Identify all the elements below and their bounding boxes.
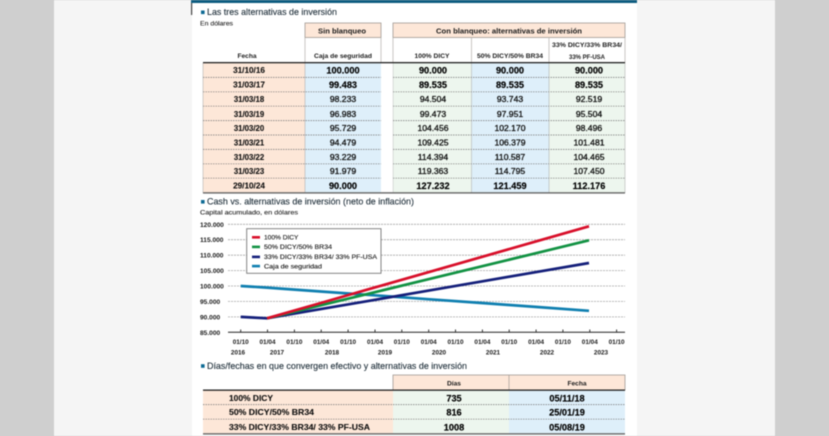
column: 33% DICY/33% BR34/33% PF-USA: 90.000 — [575, 65, 603, 75]
column: 33% DICY/33% BR34/33% PF-USA: 92.519 — [576, 94, 602, 104]
column: safe deposit box: 95.729 — [330, 123, 356, 133]
x axis: 2019 — [378, 350, 393, 356]
date column: 31/03/19 — [234, 110, 265, 119]
column headers: Caja de seguridad — [314, 53, 372, 60]
x axis: 01/04 — [313, 339, 330, 346]
column: 33% DICY/33% BR34/33% PF-USA: 89.535 — [575, 80, 603, 90]
date column: 31/03/18 — [234, 95, 265, 104]
row: 100% DICY: 05/11/18 — [549, 394, 585, 404]
column: 50% DICY/50% BR34: 90.000 — [496, 65, 524, 75]
column: safe deposit box: 100.000 — [326, 65, 360, 75]
legend: Caja de seguridad — [264, 263, 322, 270]
x axis: 2021 — [486, 350, 501, 356]
column: 50% DICY/50% BR34: 97.951 — [497, 109, 523, 119]
subtitle: accumulated capital: Capital acumulado, en dólares — [200, 210, 299, 216]
heading: investment alternatives: Las tres alternativas de inversión — [207, 7, 337, 17]
column: 33% DICY/33% BR34/33% PF-USA: 95.504 — [576, 109, 602, 119]
column headers — [237, 28, 622, 61]
date column: 31/03/20 — [234, 124, 265, 133]
line chart — [200, 222, 625, 356]
x axis: 01/04 — [474, 339, 491, 346]
column: 33% DICY/33% BR34/33% PF-USA: 98.496 — [576, 123, 602, 133]
column: 100% DICY: 119.363 — [418, 166, 448, 176]
column: safe deposit box: 99.483 — [329, 80, 357, 90]
column: safe deposit box: 96.983 — [330, 109, 356, 119]
column: 100% DICY: 109.425 — [417, 138, 449, 148]
column headers: Con blanqueo: alternativas de inversión — [436, 28, 582, 36]
column headers: Sin blanqueo — [318, 28, 366, 36]
x axis: 01/10 — [340, 339, 357, 346]
column headers: Fecha — [567, 380, 587, 388]
row: 50% DICY/50% BR34: 25/01/19 — [549, 408, 585, 418]
column: 50% DICY/50% BR34: 121.459 — [493, 181, 527, 191]
row: 33% DICY/33% BR34/33% PF-USA: 05/08/19 — [549, 422, 585, 432]
row: 33% DICY/33% BR34/33% PF-USA: 33% DICY/33% BR34/ 33% PF-USA — [229, 423, 370, 432]
column headers: 100% DICY — [414, 53, 450, 60]
y axis labels: 110.000 — [200, 253, 224, 260]
column: safe deposit box: 98.233 — [330, 94, 356, 104]
column: 50% DICY/50% BR34: 93.743 — [497, 94, 523, 104]
x axis: 2017 — [270, 350, 285, 356]
row: 33% DICY/33% BR34/33% PF-USA — [229, 422, 585, 432]
x axis: 01/04 — [528, 339, 545, 346]
column: 33% DICY/33% BR34/33% PF-USA: 112.176 — [573, 181, 605, 191]
date column: 31/10/16 — [233, 66, 265, 75]
column: safe deposit box: 90.000 — [329, 181, 357, 191]
date column — [233, 66, 265, 191]
legend: 100% DICY — [264, 235, 299, 242]
y axis labels — [200, 222, 224, 337]
column: 33% DICY/33% BR34/33% PF-USA — [573, 65, 605, 191]
x axis: 2023 — [594, 350, 609, 356]
date column: 31/03/22 — [234, 153, 265, 162]
top bar — [191, 0, 637, 15]
column: safe deposit box: 94.479 — [330, 138, 356, 148]
y axis labels: 105.000 — [200, 268, 224, 275]
date column: 31/03/21 — [234, 139, 265, 148]
column: 100% DICY: 90.000 — [419, 65, 447, 75]
table: three investment alternatives — [203, 23, 625, 194]
x axis: 01/10 — [609, 339, 625, 346]
column: safe deposit box — [326, 65, 360, 191]
row: 50% DICY/50% BR34 — [229, 408, 585, 418]
column: 50% DICY/50% BR34: 102.170 — [494, 123, 526, 133]
column: 50% DICY/50% BR34: 106.379 — [494, 138, 526, 148]
y axis labels: 120.000 — [200, 222, 224, 229]
column headers — [447, 380, 587, 388]
heading: convergence dates: Días/fechas en que convergen efectivo y alternativas de inversión — [207, 361, 467, 371]
x axis: 01/04 — [421, 339, 437, 346]
line: 33% DICY/33% BR34/33% PF-USA — [241, 263, 589, 318]
column: 33% DICY/33% BR34/33% PF-USA: 101.481 — [573, 138, 605, 148]
column: 50% DICY/50% BR34: 89.535 — [496, 80, 524, 90]
row: 33% DICY/33% BR34/33% PF-USA: 1008 — [444, 422, 464, 432]
column: 33% DICY/33% BR34/33% PF-USA: 107.450 — [573, 166, 605, 176]
column: 100% DICY: 127.232 — [416, 181, 450, 191]
column: 100% DICY: 89.535 — [419, 80, 447, 90]
x axis: 01/04 — [367, 339, 383, 346]
y axis labels: 100.000 — [200, 284, 224, 290]
line: 100% DICY — [267, 226, 589, 318]
row: 100% DICY: 100% DICY — [229, 394, 274, 403]
row: 100% DICY — [229, 394, 585, 404]
legend — [247, 229, 381, 273]
legend: 50% DICY/50% BR34 — [264, 244, 332, 251]
line: safe deposit box — [241, 286, 589, 311]
x axis: 01/10 — [501, 339, 518, 346]
column: 100% DICY: 94.504 — [420, 94, 446, 104]
table: convergence days and dates — [203, 375, 625, 435]
column: safe deposit box: 91.979 — [330, 166, 356, 176]
line: 50% DICY/50% BR34 — [267, 240, 589, 318]
x axis: 2018 — [325, 350, 340, 356]
x axis: 01/10 — [448, 339, 464, 346]
column: 100% DICY: 99.473 — [420, 109, 446, 119]
date column: 31/03/17 — [233, 80, 265, 90]
x axis: 2016 — [231, 350, 246, 356]
x axis — [228, 330, 625, 356]
column: 50% DICY/50% BR34: 114.795 — [495, 166, 525, 176]
column headers: 50% DICY/50% BR34 — [477, 53, 543, 60]
column: 100% DICY: 104.456 — [417, 123, 449, 133]
x axis: 2020 — [432, 350, 447, 356]
column headers: 33% PF-USA — [569, 54, 605, 61]
row: 100% DICY: 735 — [446, 394, 462, 404]
x axis: 01/10 — [286, 339, 303, 346]
column: 50% DICY/50% BR34 — [493, 65, 527, 191]
x axis: 2022 — [540, 350, 555, 356]
column: 50% DICY/50% BR34: 110.587 — [495, 152, 525, 162]
row: 50% DICY/50% BR34: 816 — [446, 408, 462, 418]
date column: 29/10/24 — [233, 182, 265, 191]
x axis: 01/04 — [582, 339, 598, 346]
y axis labels: 95.000 — [200, 299, 221, 306]
heading: cash vs alternatives: Cash vs. alternativas de inversión (neto de inflación) — [207, 197, 414, 207]
x axis: 01/10 — [394, 339, 410, 346]
y axis labels: 115.000 — [200, 237, 224, 244]
column headers: Días — [447, 380, 461, 388]
row: 50% DICY/50% BR34: 50% DICY/50% BR34 — [229, 408, 314, 417]
y axis labels: 85.000 — [200, 330, 221, 337]
x axis: 01/10 — [555, 339, 571, 346]
x axis: 01/10 — [233, 339, 249, 346]
column headers: 33% DICY/33% BR34/ — [552, 42, 622, 49]
column: safe deposit box: 93.229 — [330, 152, 356, 162]
column headers: Fecha — [237, 53, 257, 60]
column: 100% DICY — [416, 65, 450, 191]
x axis: 01/04 — [260, 339, 276, 346]
subtitle: in dollars: En dólares — [200, 20, 234, 28]
column: 100% DICY: 114.394 — [418, 152, 448, 162]
date column: 31/03/23 — [234, 167, 265, 176]
y axis labels: 90.000 — [200, 314, 221, 321]
column: 33% DICY/33% BR34/33% PF-USA: 104.465 — [573, 152, 605, 162]
legend: 33% DICY/33% BR34/ 33% PF-USA — [264, 254, 378, 261]
